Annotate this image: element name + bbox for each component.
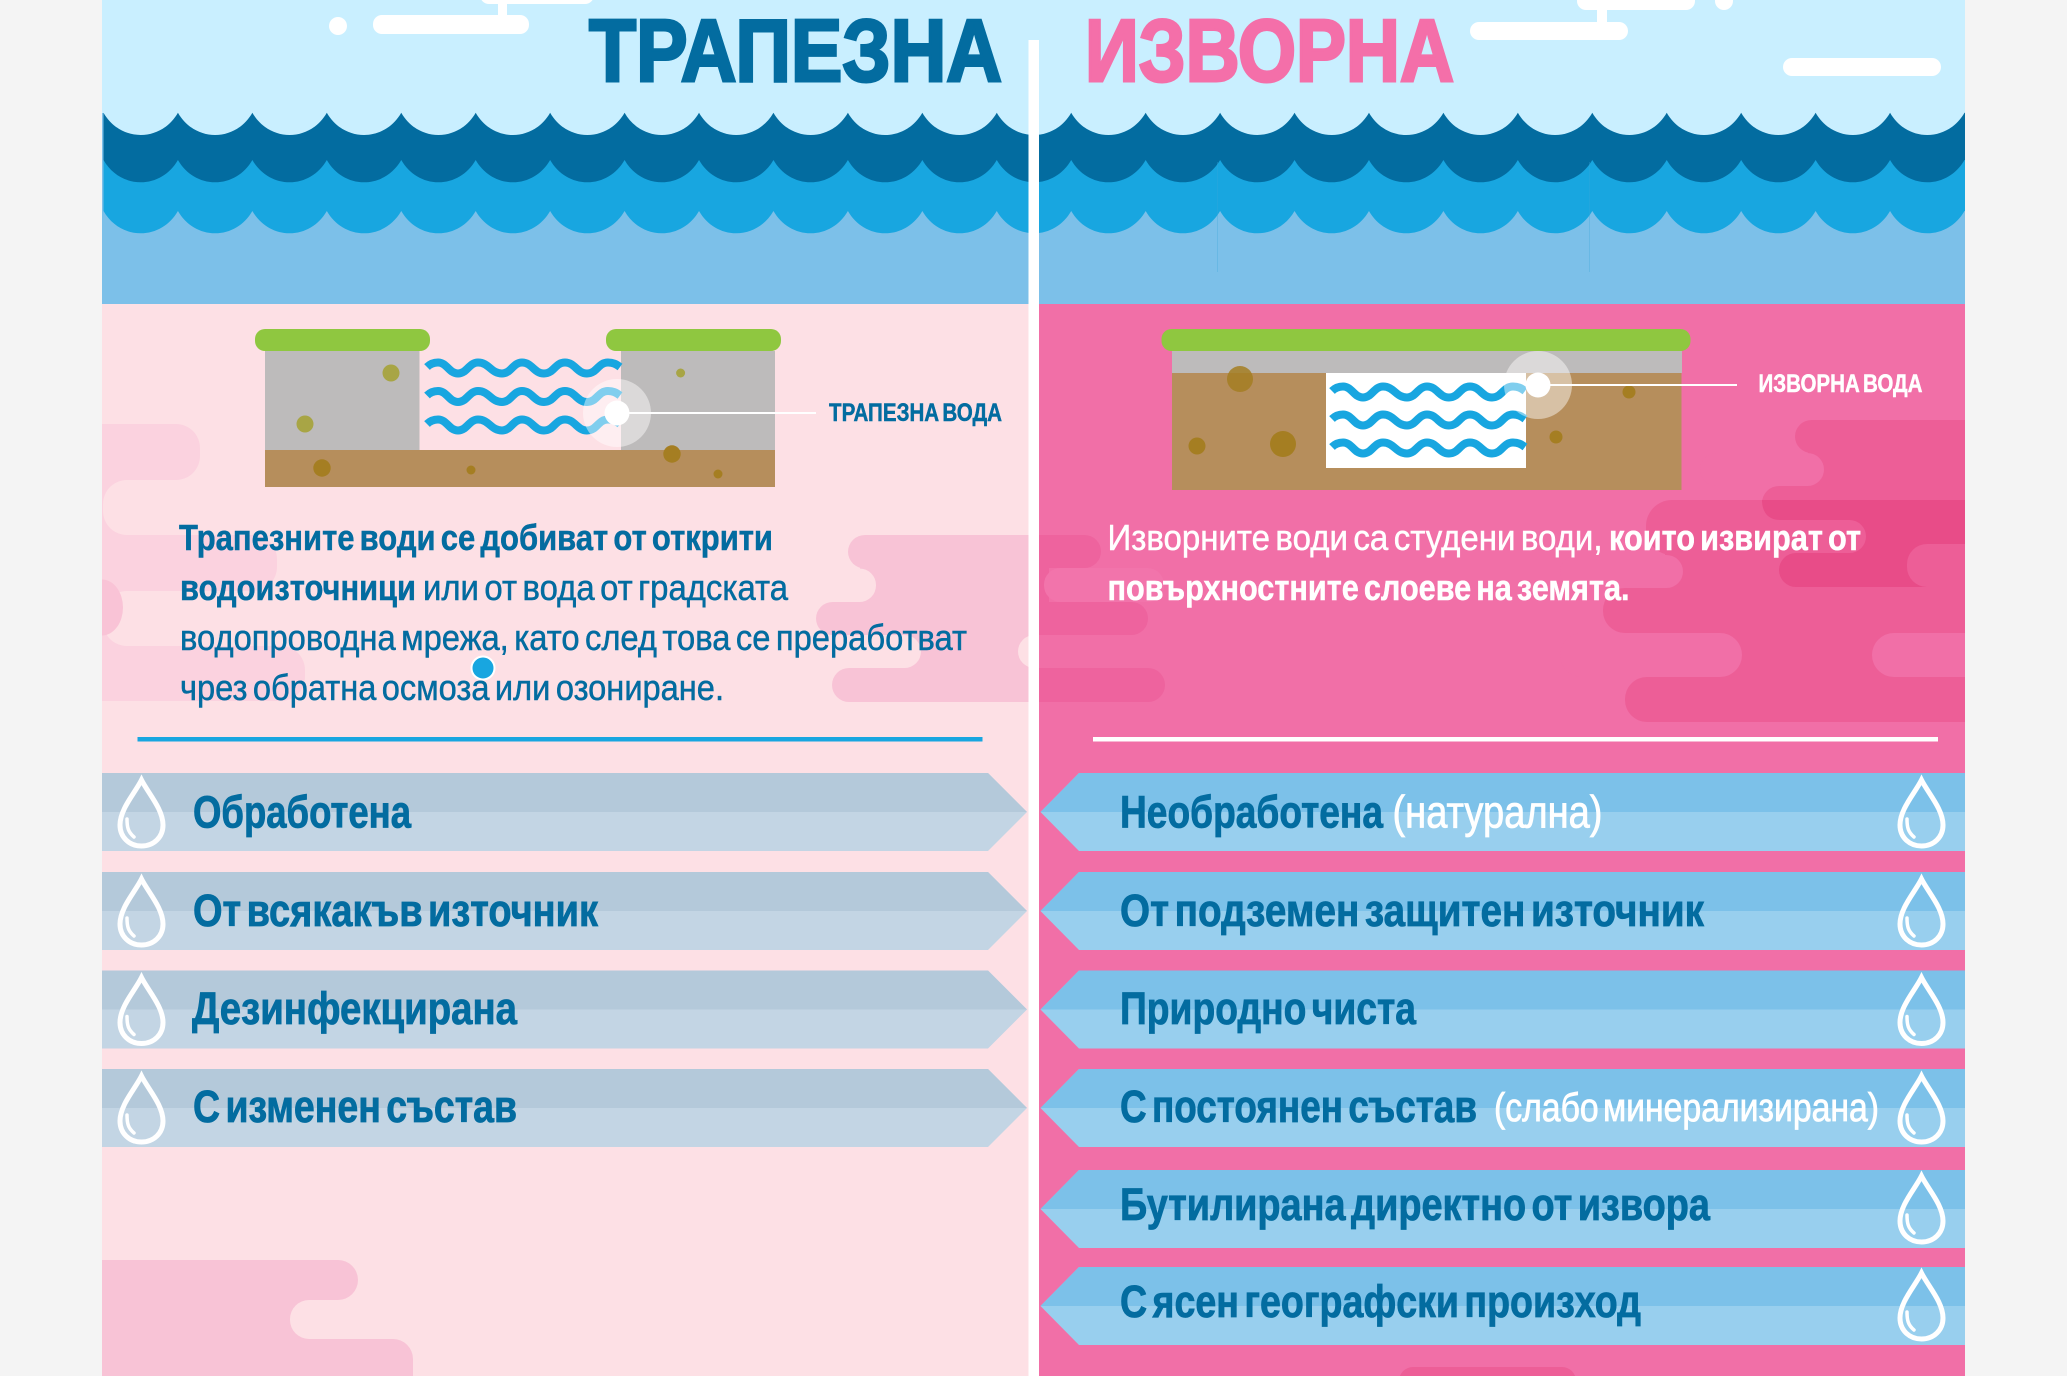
rule: left xyxy=(138,737,982,742)
label: spring water: ИЗВОРНА ВОДА xyxy=(1758,370,1922,398)
row: с постоянен състав: С постоянен състав xyxy=(1120,1081,1477,1132)
text block: spring water description: повърхностните слоеве на земята. xyxy=(1108,567,1630,608)
row: природно чиста xyxy=(1040,970,1965,1048)
icon: blue dot xyxy=(472,656,494,680)
text block: table water description: водоизточници xyxy=(180,567,416,608)
row: необработена: Необработена xyxy=(1120,786,1384,838)
label: table water: ТРАПЕЗНА ВОДА xyxy=(829,399,1002,427)
icon: white clouds left xyxy=(329,0,594,35)
row: дезинфекцирана xyxy=(102,970,1027,1048)
divider: center white line xyxy=(1028,40,1039,1376)
row: природно чиста: Природно чиста xyxy=(1120,983,1417,1034)
title: spring water: ИЗВОРНА xyxy=(1085,1,1454,100)
panel: header sky and waves xyxy=(102,0,1965,304)
row: с изменен състав: С изменен състав xyxy=(193,1081,517,1132)
text block: spring water description xyxy=(1108,517,1861,608)
row: от подземен защитен източник: От подземен защитен източник xyxy=(1120,885,1704,936)
text block: table water description: или от вода от градската xyxy=(423,567,789,608)
panel: table water background xyxy=(102,304,1028,1376)
row: бутилирана директно от извора: Бутилирана директно от извора xyxy=(1120,1179,1711,1230)
text block: table water description: водопроводна мрежа, като след това се преработват xyxy=(180,617,967,658)
row: с ясен географски произход: С ясен географски произход xyxy=(1120,1276,1641,1327)
row: дезинфекцирана: Дезинфекцирана xyxy=(192,983,518,1034)
row: необработена xyxy=(1040,773,1965,851)
illustration: spring water ground section xyxy=(1162,329,1737,490)
list: table water properties xyxy=(102,773,1027,1147)
row: от всякакъв източник xyxy=(102,872,1027,950)
clouds: left panel decoration xyxy=(60,424,1078,1376)
row: от всякакъв източник: От всякакъв източник xyxy=(193,885,598,936)
panel: spring water background xyxy=(1039,304,1965,1376)
icon: white clouds right xyxy=(1470,0,1941,76)
row: бутилирана директно от извора xyxy=(1040,1170,1965,1248)
clouds: right panel decoration xyxy=(1000,420,2007,1376)
title: table water: ТРАПЕЗНА xyxy=(589,1,1002,100)
text block: table water description: чрез обратна осмоза или озониране. xyxy=(180,667,724,708)
row: с постоянен състав xyxy=(1040,1069,1965,1147)
row: с ясен географски произход xyxy=(1040,1267,1965,1345)
row: обработена xyxy=(102,773,1027,851)
list: spring water properties xyxy=(1040,773,1965,1345)
row: с изменен състав xyxy=(102,1069,1027,1147)
text block: table water description xyxy=(179,517,967,708)
rule: right xyxy=(1093,737,1938,742)
text block: table water description: Трапезните води се добиват от открити xyxy=(179,517,773,558)
text block: spring water description: които извират от xyxy=(1609,517,1861,558)
row: обработена: Обработена xyxy=(193,786,412,838)
row: с постоянен състав: (слабо минерализирана) xyxy=(1494,1086,1879,1130)
row: от подземен защитен източник xyxy=(1040,872,1965,950)
row: необработена: (натурална) xyxy=(1392,786,1602,838)
text block: spring water description: Изворните води са студени води, xyxy=(1108,517,1602,558)
illustration: table water ground section xyxy=(255,329,816,487)
